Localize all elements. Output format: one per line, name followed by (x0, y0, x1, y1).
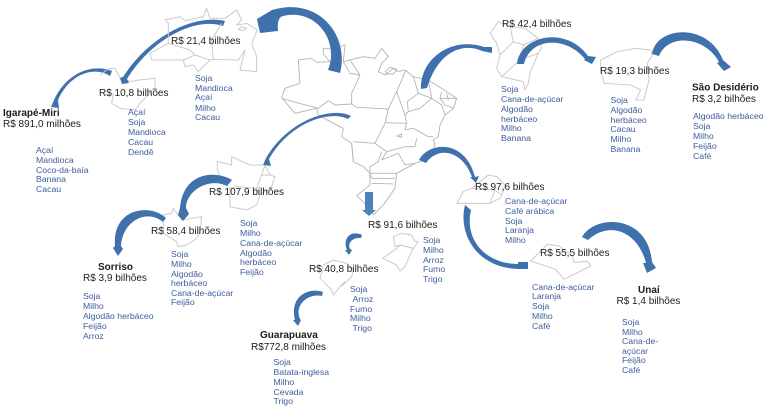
value: R$ 91,6 bilhões: R$ 91,6 bilhões (368, 220, 438, 231)
map: North region (150, 8, 257, 72)
crop list: Unaí: Café (622, 365, 641, 375)
panel: Pará Nordeste (99, 20, 225, 157)
crop list: Unaí: Milho (622, 327, 643, 337)
arrow: to Paraná (345, 233, 362, 255)
crop list: Center-West region: Feijão (240, 267, 264, 277)
value: R$ 21,4 bilhões: R$ 21,4 bilhões (171, 36, 240, 47)
crop list: Mato Grosso: Feijão (171, 297, 195, 307)
map: Northeast region (490, 22, 542, 90)
crop list: Southeast region: Laranja (505, 225, 534, 235)
arrow: to North region (257, 7, 342, 73)
crop list: South region: Trigo (423, 274, 443, 284)
map: mesoregion (100, 68, 155, 110)
value: R$ 19,3 bilhões: R$ 19,3 bilhões (600, 66, 670, 77)
arrow: to Southeast region (419, 147, 479, 183)
crop list: Bahia: Algodão (610, 105, 643, 115)
map: Center-West region (217, 157, 275, 210)
crop list: Northeast region: Soja (501, 84, 519, 94)
crop list: Northeast region: Algodão (501, 104, 533, 114)
crop list: Southeast region: Café arábica (505, 206, 554, 216)
value: R$ 55,5 bilhões: R$ 55,5 bilhões (540, 248, 610, 259)
arrow: to Center-West region (263, 113, 351, 166)
crop list: North region: Cacau (195, 112, 220, 122)
crop list: mesoregion: Soja (128, 117, 146, 127)
crop list: Bahia: herbáceo (610, 115, 647, 125)
crop list: Center-West region: Milho (240, 228, 261, 238)
value: R$ 97,6 bilhões: R$ 97,6 bilhões (475, 182, 544, 193)
crop list: Igarapé-Miri: Banana (36, 174, 66, 184)
crop list: São Desidério: Café (693, 151, 712, 161)
panel: Região Norte (150, 7, 342, 122)
value: R$ 107,9 bilhões: R$ 107,9 bilhões (209, 187, 284, 198)
crop list: Bahia: Milho (610, 134, 631, 144)
crop list: North region: Soja (195, 73, 213, 83)
map: Brazil states (282, 45, 457, 215)
crop list: Guarapuava: Batata-inglesa (274, 367, 329, 377)
arrow: to Bahia (517, 37, 596, 64)
crop list: São Paulo: Laranja (532, 291, 561, 301)
value: R$ 1,4 bilhões: R$ 1,4 bilhões (616, 296, 680, 307)
arrow: to São Desidério (652, 32, 731, 71)
crop list: São Paulo: Milho (532, 311, 553, 321)
crop list: Paraná: Soja (350, 284, 368, 294)
crop list: Sorriso: Arroz (83, 331, 104, 341)
arrow: to São Paulo (463, 205, 528, 269)
crop list: Paraná: Fumo (350, 304, 372, 314)
crop list: mesoregion: Mandioca (128, 127, 166, 137)
crop list: São Desidério: Soja (693, 121, 711, 131)
crop list: North region: Açaí (195, 92, 213, 102)
crop list: Mato Grosso: Cana-de-açúcar (171, 288, 233, 298)
crop list: Bahia: Soja (610, 95, 628, 105)
crop list: Paraná: Milho (350, 313, 371, 323)
crop list: Northeast region: Banana (501, 133, 531, 143)
arrow: to Guarapuava (293, 291, 323, 326)
crop list: Southeast region: Milho (505, 235, 526, 245)
crop list: São Desidério: Algodão herbáceo (693, 111, 764, 121)
panel: Bahia (517, 37, 670, 154)
crop list: Sorriso: Algodão herbáceo (83, 311, 154, 321)
crop list: São Paulo: Café (532, 321, 551, 331)
crop list: Center-West region: Soja (240, 218, 258, 228)
heading: São Desidério: São Desidério (692, 82, 759, 94)
panel: Paraná (309, 233, 378, 333)
crop list: Center-West region: Algodão (240, 248, 272, 258)
value: R$ 42,4 bilhões: R$ 42,4 bilhões (502, 19, 572, 30)
crop list: Guarapuava: Soja (274, 357, 291, 367)
crop list: Unaí: Feijão (622, 355, 646, 365)
arrow: to microregion (120, 20, 225, 84)
crop list: mesoregion: Açaí (128, 107, 146, 117)
crop list: South region: Soja (423, 235, 441, 245)
arrow: to South region (362, 192, 376, 216)
panel: Região Sul (362, 192, 445, 284)
crop list: Mato Grosso: herbáceo (171, 278, 207, 288)
crop list: North region: Milho (195, 103, 216, 113)
heading: Unaí: Unaí (638, 285, 661, 296)
crop list: Center-West region: Cana-de-açúcar (240, 238, 302, 248)
map: Paraná (320, 260, 353, 295)
panel: Sorriso (83, 210, 166, 341)
panel: Região Sudeste (419, 147, 567, 245)
panel: Mato Grosso (151, 175, 233, 307)
crop list: Igarapé-Miri: Mandioca (36, 155, 74, 165)
crop list: São Desidério: Feijão (693, 141, 717, 151)
panel: Igarapé-Miri (3, 68, 112, 194)
crop list: Northeast region: herbáceo (501, 114, 537, 124)
crop list: São Paulo: Soja (532, 301, 550, 311)
heading: Guarapuava: Guarapuava (260, 330, 318, 341)
crop list: Paraná: Arroz (352, 294, 373, 304)
crop list: Guarapuava: Trigo (274, 396, 293, 406)
crop list: Southeast region: Soja (505, 216, 523, 226)
crop list: Sorriso: Feijão (83, 321, 107, 331)
panel: Unaí (582, 222, 680, 375)
heading: Sorriso: Sorriso (98, 262, 133, 273)
crop list: Igarapé-Miri: Coco-da-baía (36, 165, 89, 175)
crop list: Unaí: açúcar (622, 346, 648, 356)
value: R$ 40,8 bilhões: R$ 40,8 bilhões (309, 264, 378, 275)
arrow: to Sorriso (113, 210, 166, 256)
arrow: to Northeast region (421, 44, 492, 89)
value: R$ 3,9 bilhões: R$ 3,9 bilhões (83, 273, 147, 284)
crop list: Bahia: Cacau (610, 124, 636, 134)
crop list: Guarapuava: Cevada (274, 387, 304, 397)
value: R$ 891,0 milhões: R$ 891,0 milhões (3, 119, 81, 130)
crop list: Southeast region: Cana-de-açúcar (505, 196, 567, 206)
panel: São Paulo (463, 205, 610, 331)
crop list: Mato Grosso: Soja (171, 249, 189, 259)
crop list: mesoregion: Dendê (128, 147, 154, 157)
value: R$ 3,2 bilhões: R$ 3,2 bilhões (692, 94, 756, 105)
crop list: South region: Milho (423, 245, 444, 255)
crop list: North region: Mandioca (195, 83, 233, 93)
crop list: Bahia: Banana (610, 144, 641, 154)
crop list: Mato Grosso: Milho (171, 259, 192, 269)
crop list: Sorriso: Soja (83, 291, 101, 301)
panel: Região Nordeste (421, 19, 572, 143)
crop list: Igarapé-Miri: Açaí (36, 145, 54, 155)
crop list: Sorriso: Milho (83, 301, 104, 311)
crop list: South region: Arroz (423, 255, 444, 265)
panel: Guarapuava (251, 291, 329, 406)
crop list: South region: Fumo (423, 264, 445, 274)
map: São Paulo (531, 244, 591, 279)
crop list: Unaí: Soja (622, 317, 640, 327)
arrow: to Unaí (582, 222, 656, 273)
panel: Região Centro-Oeste (209, 113, 351, 277)
crop list: Unaí: Cana-de- (622, 336, 658, 346)
crop list: Paraná: Trigo (352, 323, 372, 333)
map: Bahia (601, 48, 652, 100)
crop list: Mato Grosso: Algodão (171, 269, 203, 279)
value: R$772,8 milhões: R$772,8 milhões (251, 342, 326, 353)
crop list: Center-West region: herbáceo (240, 257, 276, 267)
crop list: São Desidério: Milho (693, 131, 714, 141)
arrow: to Mato Grosso (178, 175, 232, 221)
panel: São Desidério (652, 32, 764, 161)
arrow: to Igarapé-Miri (51, 68, 112, 108)
crop list: mesoregion: Cacau (128, 137, 153, 147)
crop list: Northeast region: Milho (501, 123, 522, 133)
map: Mato Grosso (163, 208, 202, 247)
crop list: Igarapé-Miri: Cacau (36, 184, 61, 194)
value: R$ 10,8 bilhões: R$ 10,8 bilhões (99, 88, 168, 99)
map: Southeast region (457, 175, 505, 203)
crop list: Northeast region: Cana-de-açúcar (501, 94, 563, 104)
value: R$ 58,4 bilhões: R$ 58,4 bilhões (151, 226, 220, 237)
map: South region (383, 233, 418, 271)
heading: Igarapé-Miri: Igarapé-Miri (3, 108, 60, 119)
crop list: Guarapuava: Milho (274, 377, 294, 387)
crop list: São Paulo: Cana-de-açúcar (532, 282, 594, 292)
